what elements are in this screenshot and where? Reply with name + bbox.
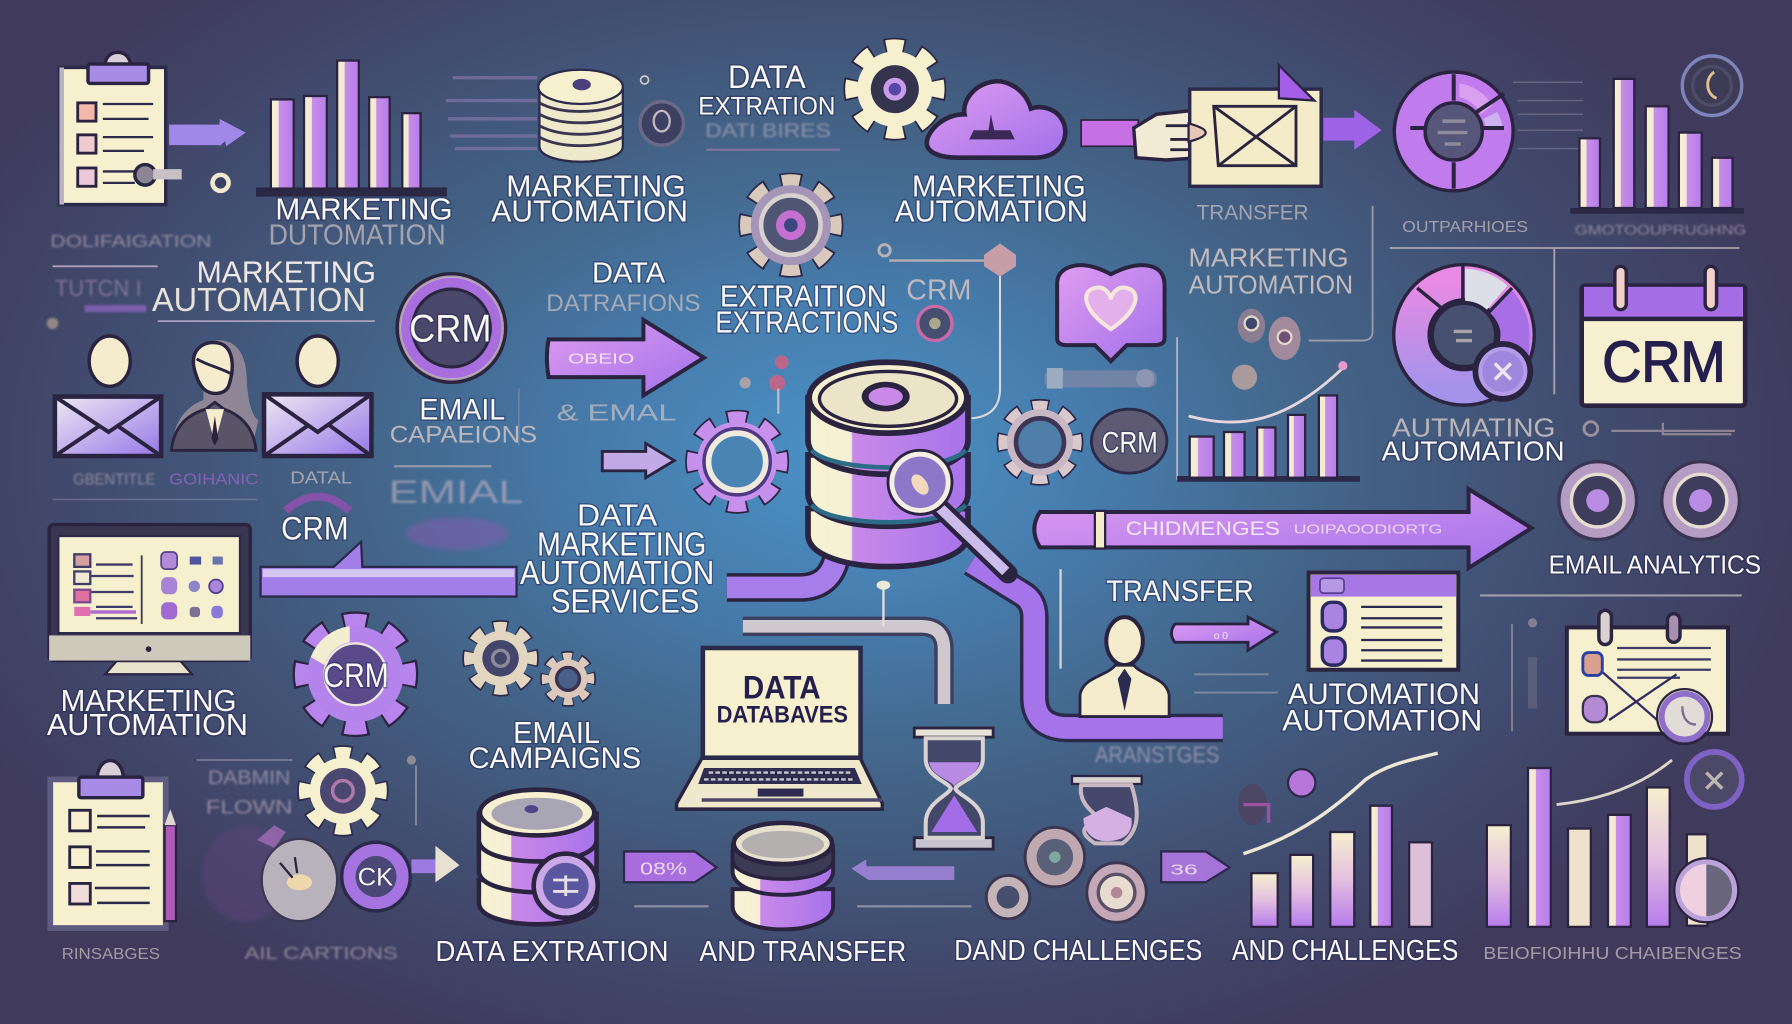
arrow: transfer xyxy=(1171,617,1277,650)
heading: data marketing automation services: SERVICES xyxy=(551,584,699,621)
dim widget left: TUTCN I xyxy=(55,275,142,301)
icon: database badge xyxy=(534,854,598,918)
icon: laptop: DATABAVES xyxy=(717,701,848,728)
heading: data marketing automation services: AUTOMATION xyxy=(520,555,714,592)
icon: gear central xyxy=(694,418,781,505)
heading: transfer: TRANSFER xyxy=(1106,575,1254,608)
icon: dim widget bar xyxy=(1045,368,1157,389)
heading: automation automation: AUTOMATION xyxy=(1282,704,1482,737)
heading: marketing automation A xyxy=(491,169,688,229)
labels: bottom row: AND TRANSFER xyxy=(699,936,906,968)
arrow: grey left xyxy=(851,859,954,880)
heading: automating automation: AUTOMATION xyxy=(1382,436,1565,467)
labels: bottom row: BEIOFIOIHHU CHAIBENGES xyxy=(1483,943,1742,963)
arrow: pill percent xyxy=(624,851,717,882)
bar chart top right xyxy=(1570,79,1744,214)
heading: marketing automation A: AUTOMATION xyxy=(491,194,688,229)
pipe: purple to left xyxy=(261,542,517,597)
icon: stacked discs with motion lines xyxy=(446,70,623,162)
heading: data marketing automation services xyxy=(520,498,714,621)
icon: gear bottom left xyxy=(305,753,381,829)
icons: email analytics rings xyxy=(1559,462,1739,539)
arrow: pill small right xyxy=(1161,851,1230,882)
caption: dim aranstges: ARANSTGES xyxy=(1095,741,1219,767)
pipe: purple to transfer xyxy=(971,562,1223,728)
heading: automation automation: AUTOMATION xyxy=(1288,678,1480,711)
heading: data extration: EXTRATION xyxy=(698,92,835,120)
heading: marketing automation C: AUTOMATION xyxy=(1189,270,1353,300)
heading: marketing dutomation: DUTOMATION xyxy=(269,220,446,252)
icon: central database xyxy=(808,362,968,567)
heading: email campaigns: CAMPAIGNS xyxy=(469,742,641,775)
labels: bottom row: RINSABGES xyxy=(62,946,160,963)
pipe: grey xyxy=(743,581,944,704)
captions: dim under people xyxy=(73,467,352,489)
heading: data datrafions xyxy=(546,257,701,317)
heading: extraition extractions xyxy=(715,278,898,340)
connector: hexagon dot to database xyxy=(879,243,1016,418)
icon: laptop xyxy=(677,648,882,809)
icon: hourglass large xyxy=(914,728,993,849)
caption: dim configuration: DOLIFAIGATION xyxy=(50,231,211,251)
arrow: ok to database xyxy=(411,846,459,882)
label: crm with arc: CRM xyxy=(281,510,349,546)
heading: marketing automation lower left: AUTOMATION xyxy=(47,707,248,742)
heading: data marketing automation services: DATA xyxy=(577,498,658,533)
icon: calendar CRM: CRM xyxy=(1602,331,1726,395)
icon: gear muted xyxy=(747,182,834,269)
icon: small ring xyxy=(918,306,952,341)
icon: hourglass small xyxy=(1072,776,1142,843)
dim widget left xyxy=(47,275,146,329)
heading: marketing automation lower left xyxy=(47,683,248,742)
icon: calendar envelope xyxy=(1567,610,1728,744)
icon: heart speech bubble xyxy=(1057,265,1165,361)
icon: database bottom centre xyxy=(733,823,833,929)
captions: dim labels top right xyxy=(1402,219,1746,237)
labels: bottom row: DAND CHALLENGES xyxy=(954,935,1202,967)
arrow: large purple pill xyxy=(547,320,704,395)
heading: marketing automation lower left: MARKETING xyxy=(61,683,237,718)
heading: email capaeions: CAPAEIONS xyxy=(390,421,537,448)
heading: automation automation xyxy=(1282,678,1482,737)
arrow: pill percent: 08% xyxy=(640,858,687,878)
labels: bottom row: AIL CARTIONS xyxy=(245,943,398,963)
arrow: envelope to donut xyxy=(1323,110,1382,150)
arrow: pill small right: 36 xyxy=(1170,862,1198,878)
motion lines near right chart xyxy=(1513,82,1583,149)
arrow: big challenges: UOIPAOODIORTG xyxy=(1294,523,1442,537)
captions: dim labels top right: GMOTOOUPRUGHNG xyxy=(1575,222,1746,237)
icon: magnifier on database xyxy=(888,450,1008,574)
icon: cluster of rings xyxy=(986,827,1146,922)
icon: calendar CRM xyxy=(1582,266,1745,406)
icon: monitor dashboard xyxy=(49,525,250,674)
heading: data datrafions: DATA xyxy=(592,257,665,289)
heading: data datrafions: DATRAFIONS xyxy=(546,290,701,317)
icon: laptop: DATA xyxy=(743,669,821,705)
label: crm dim: CRM xyxy=(906,274,971,306)
icon: purple bar with hand pushing xyxy=(1081,110,1214,160)
icon: ok badge: CK xyxy=(358,864,393,892)
labels: bottom row: DATA EXTRATION xyxy=(435,936,669,968)
icon: crm oval: CRM xyxy=(1102,427,1158,460)
heading: email campaigns: EMAIL xyxy=(513,715,600,750)
dim flow widget: DABMIN xyxy=(208,767,290,789)
dim pins xyxy=(407,755,416,825)
dim email widget: EMIAL xyxy=(389,474,523,510)
icon: twin small gears xyxy=(470,627,590,701)
arrow: large purple pill: OBEIO xyxy=(568,351,634,367)
chart: bars with curve bottom centre-right xyxy=(1243,753,1438,927)
heading: data extration: DATA xyxy=(728,59,806,95)
icon: crm ring: CRM xyxy=(409,308,491,351)
bar chart top left xyxy=(256,61,447,197)
heading: email campaigns xyxy=(469,715,641,775)
icon: person with tie xyxy=(1080,617,1169,717)
heading: automating automation xyxy=(1382,413,1565,467)
chart: bars with magnifier bottom right xyxy=(1487,752,1742,927)
heading: marketing automation B: MARKETING xyxy=(912,169,1086,204)
heading: email capaeions xyxy=(390,393,537,448)
dim email widget xyxy=(389,466,523,550)
heading: marketing automation B xyxy=(895,169,1088,229)
icon: gear crm: CRM xyxy=(323,657,389,695)
heading: extraition extractions: EXTRAITION xyxy=(720,278,887,313)
icon: small gear xyxy=(1005,407,1075,478)
arrow: clipboard to bars xyxy=(169,119,246,146)
labels: bottom row: AND CHALLENGES xyxy=(1232,935,1458,967)
icon: pink pin xyxy=(739,355,789,414)
icon: crm oval xyxy=(1091,409,1167,473)
heading: marketing automation left xyxy=(152,254,376,319)
heading: marketing automation left: AUTOMATION xyxy=(152,282,366,319)
caption: dim email: & EMAL xyxy=(557,400,677,426)
captions: dim under people: DATAL xyxy=(290,467,352,487)
dim small icons xyxy=(1238,769,1315,825)
icon: ring badge xyxy=(1682,56,1742,115)
icon: small ring xyxy=(213,175,229,191)
icon: clipboard checklist top left xyxy=(59,52,182,205)
captions: dim labels top right: OUTPARHIOES xyxy=(1402,219,1528,236)
heading: email capaeions: EMAIL xyxy=(419,393,505,426)
icon: clipboard bottom left xyxy=(50,761,176,928)
icon: envelope xyxy=(1189,65,1321,186)
heading: automating automation: AUTMATING xyxy=(1392,413,1555,443)
heading: marketing automation A: MARKETING xyxy=(506,169,686,204)
icon: small dark ring xyxy=(640,76,683,145)
caption: transfer: TRANSFER xyxy=(1197,199,1309,224)
icon: cloud xyxy=(927,81,1065,158)
heading: marketing dutomation xyxy=(269,191,453,252)
icon: person with envelope right xyxy=(264,336,371,456)
heading: extraition extractions: EXTRACTIONS xyxy=(715,305,898,340)
panel: automation form xyxy=(1309,573,1458,670)
dim flow widget: FLOWN xyxy=(206,797,293,819)
icon: database bottom left xyxy=(479,790,597,924)
label: crm with arc xyxy=(281,497,350,546)
chart: line and bars middle right xyxy=(1177,309,1360,480)
heading: marketing automation left: MARKETING xyxy=(197,254,376,289)
arrow: big challenges: CHIDMENGES xyxy=(1126,518,1280,540)
icon: person with envelope left xyxy=(55,336,161,456)
dim flow widget xyxy=(197,760,293,922)
heading: marketing automation C: MARKETING xyxy=(1189,242,1349,272)
captions: dim under people: GOIHANIC xyxy=(169,472,258,489)
icon: ok badge xyxy=(342,842,410,911)
heading: data marketing automation services: MARKETING xyxy=(537,526,706,563)
heading: marketing dutomation: MARKETING xyxy=(275,191,453,226)
icon: woman xyxy=(171,340,258,450)
heading: marketing automation C xyxy=(1189,242,1353,300)
chart: donut right xyxy=(1411,265,1530,399)
arrow: to central gear xyxy=(602,443,674,478)
heading: data extration xyxy=(698,59,835,142)
heading: data extration: DATI BIRES xyxy=(705,120,831,142)
small widget near calendar xyxy=(1584,422,1735,435)
chart: donut top right xyxy=(1410,74,1504,189)
icon: grey circle with spark xyxy=(262,839,337,921)
labels: bottom row xyxy=(62,935,1742,968)
pipe: purple inner left xyxy=(727,558,837,587)
icon: crm ring xyxy=(398,274,505,382)
captions: dim under people: GBENTITLE xyxy=(73,472,155,489)
dim connector column xyxy=(1512,618,1537,731)
arrow: big challenges xyxy=(1034,489,1531,568)
heading: email analytics: EMAIL ANALYTICS xyxy=(1549,550,1761,580)
icon: gear top xyxy=(853,47,937,131)
heading: marketing automation B: AUTOMATION xyxy=(895,194,1088,229)
pipe: purple under database left xyxy=(727,558,837,587)
arrow: transfer: o 0 xyxy=(1214,631,1228,642)
icon: gear crm xyxy=(303,622,408,727)
